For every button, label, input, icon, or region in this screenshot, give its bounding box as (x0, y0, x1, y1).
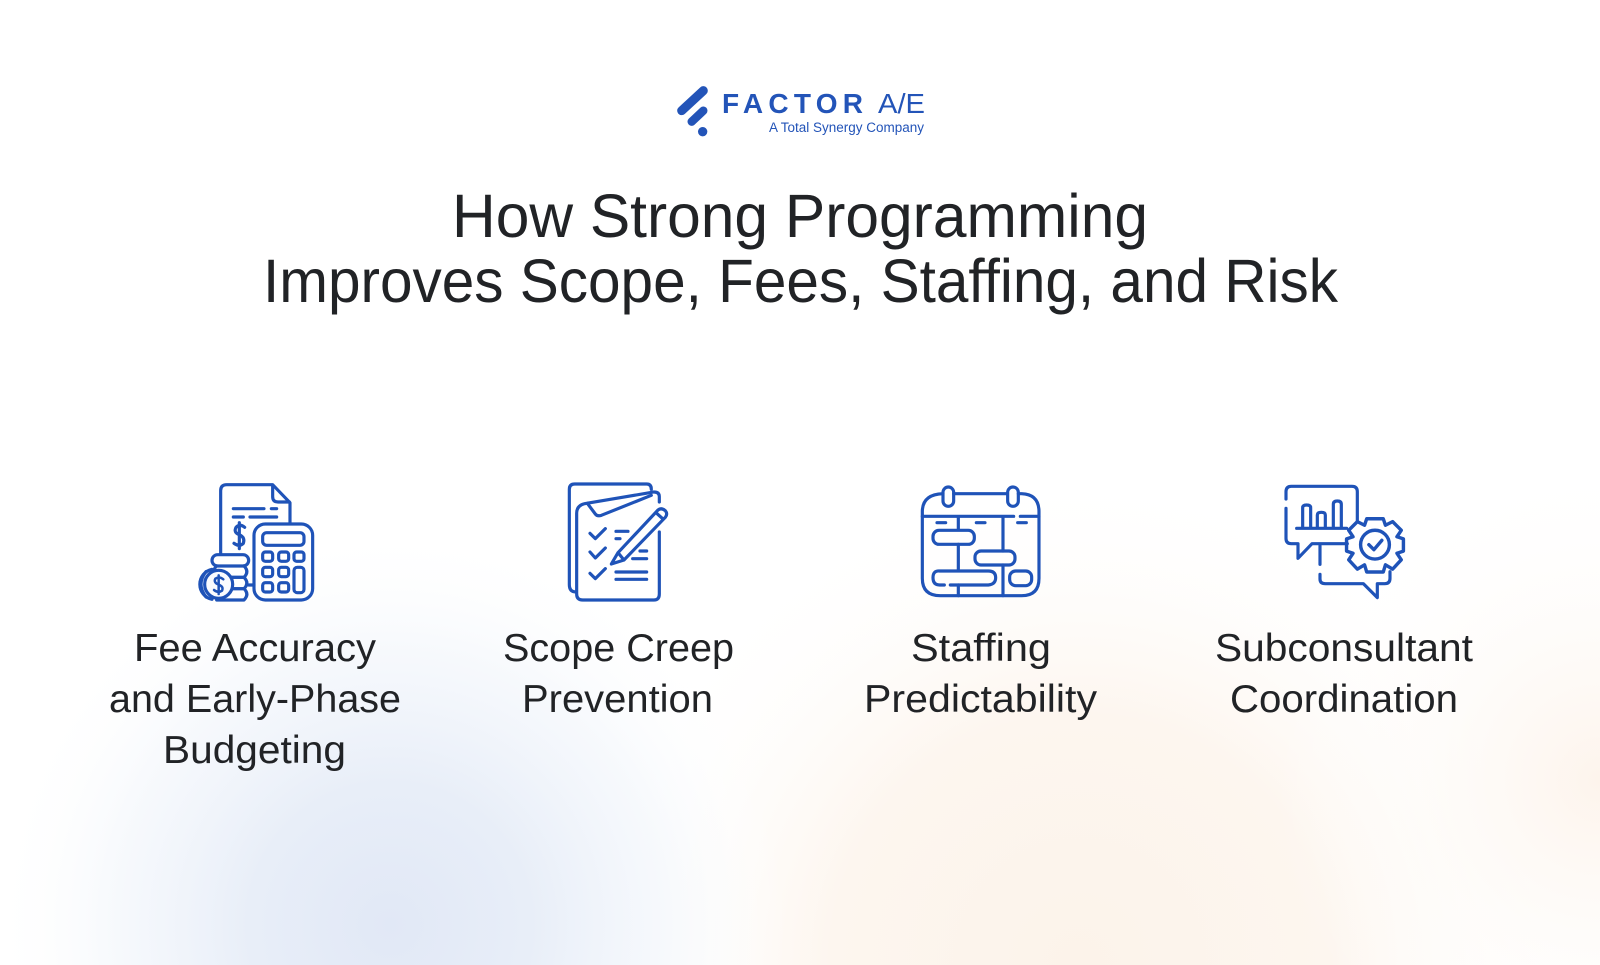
label (864, 627, 1098, 721)
logo (682, 88, 925, 136)
title (263, 182, 1338, 315)
label: Scope Creep (503, 627, 734, 670)
icon: chart bubbles and gear (1286, 486, 1403, 598)
label: Coordination (1230, 678, 1458, 721)
label: Fee Accuracy (134, 627, 377, 670)
label: Staffing (911, 627, 1051, 670)
label: Predictability (864, 678, 1098, 721)
icon: checklist and pencil (569, 484, 667, 600)
panel: fee accuracy (109, 485, 401, 772)
panel: scope creep (503, 484, 734, 721)
label: Prevention (522, 678, 713, 721)
logo tagline: A Total Synergy Company (769, 120, 924, 135)
label: Subconsultant (1215, 627, 1473, 670)
icon: invoice, coins and calculator (200, 485, 313, 600)
label (1215, 627, 1473, 721)
label: and Early-Phase (109, 678, 401, 721)
logo mark (682, 91, 707, 136)
title: How Strong Programming (452, 182, 1148, 250)
icon: gantt calendar (922, 487, 1039, 596)
title: Improves Scope, Fees, Staffing, and Risk (263, 247, 1338, 315)
logo suffix: A/E (878, 88, 925, 119)
panel: subconsultant (1215, 486, 1473, 721)
label (109, 627, 401, 772)
logo wordmark: FACTOR (722, 88, 863, 119)
label: Budgeting (163, 729, 346, 772)
label (503, 627, 734, 721)
panel: staffing (864, 487, 1098, 721)
